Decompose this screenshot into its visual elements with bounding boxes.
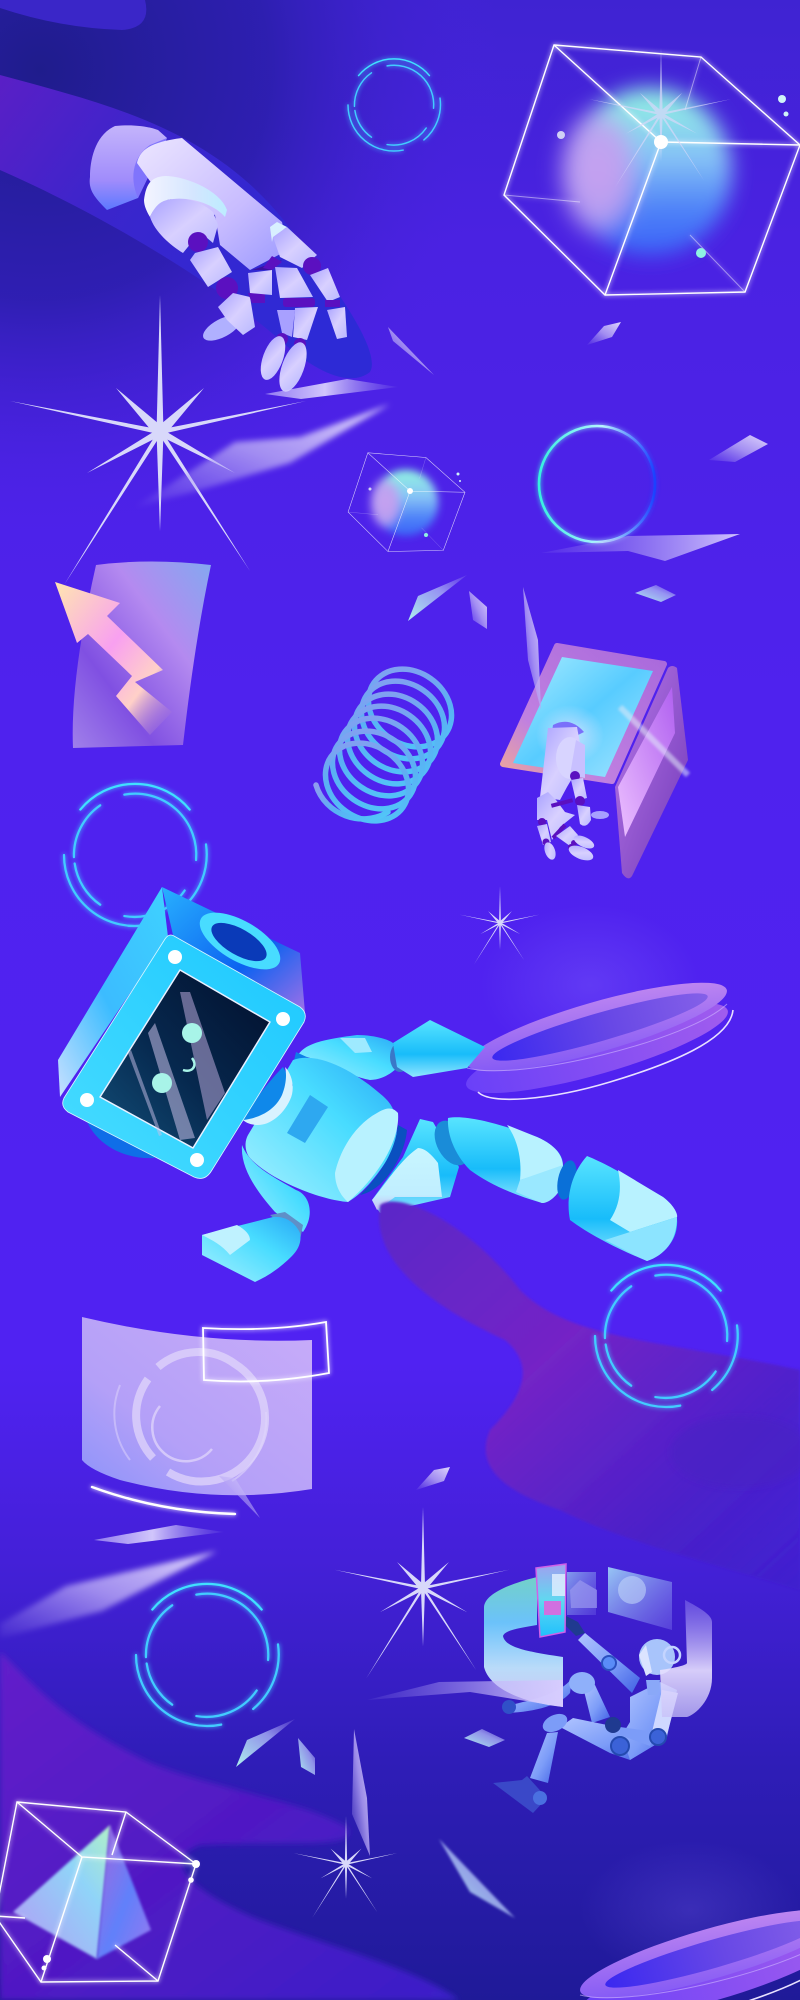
arrow panel (55, 562, 211, 748)
shards: lower group (0, 1467, 515, 1918)
dark inner blob (670, 1416, 800, 1488)
star: middle (460, 886, 539, 964)
ring: lower right (595, 1265, 738, 1407)
big star (10, 295, 306, 585)
ring: lower left (136, 1584, 279, 1726)
hologram right panel (608, 1567, 672, 1630)
phone (536, 1564, 566, 1637)
ring: top centre (348, 59, 440, 151)
purple background blob over robot hip (379, 1202, 800, 1590)
ring: left (64, 784, 207, 926)
robot hand: top (90, 125, 347, 395)
glowing disc: upper (459, 905, 735, 1110)
shards: upper group (135, 322, 768, 629)
hologram left band (484, 1577, 563, 1707)
glowing disc: bottom right (572, 1840, 800, 2000)
spring (310, 653, 467, 837)
star: lower centre (334, 1507, 509, 1678)
robot upper arm (298, 1020, 485, 1080)
curved lavender panel (82, 1317, 329, 1514)
blue robot (58, 887, 677, 1282)
star: bottom centre (294, 1816, 397, 1918)
tablet with robot hand (503, 587, 688, 878)
translucent shard over robot (367, 1680, 563, 1707)
small robot with holographic screens (367, 1564, 712, 1813)
glowing circle (539, 426, 655, 542)
hologram middle panel (567, 1572, 597, 1615)
small wireframe cube (348, 453, 465, 552)
robot left arm and hand (202, 1145, 310, 1282)
wireframe cube with blob: top right (504, 45, 800, 295)
robot right leg (372, 1115, 677, 1261)
robot torso (243, 1052, 407, 1202)
robot head (58, 887, 305, 1178)
robot figure (493, 1612, 680, 1813)
wireframe cube with pyramid (0, 1802, 200, 1982)
hologram right band (660, 1600, 712, 1717)
